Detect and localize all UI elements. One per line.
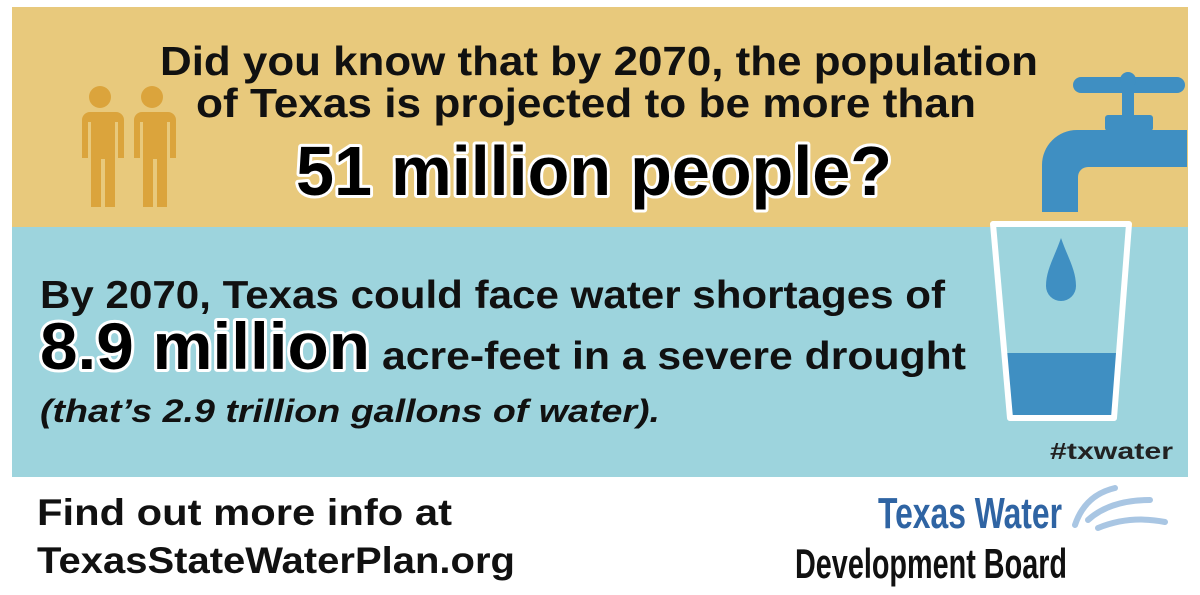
logo: Texas Water Development Board — [795, 488, 1165, 587]
callout: 8.9 million acre-feet: 8.9 million — [40, 309, 370, 383]
callout: 8.9 million acre-feet: acre-feet in a severe drought — [382, 335, 966, 378]
panel: water shortage (blue band) — [12, 227, 1188, 477]
text: hashtag: #txwater — [1050, 438, 1173, 464]
callout: 51 million people: 51 million people? — [296, 132, 892, 210]
heading: did you know: Did you know that by 2070, the population — [160, 38, 1038, 84]
text: by 2070 shortages: By 2070, Texas could face water shortages of — [40, 274, 946, 317]
text: find out more: TexasStateWaterPlan.org — [37, 540, 515, 581]
text: of Texas projected: of Texas is projected to be more than — [196, 80, 976, 126]
icon: glass of water — [993, 224, 1129, 418]
icon: faucet — [1042, 72, 1187, 212]
icon: two people — [82, 86, 176, 207]
panel: population (yellow band) — [12, 7, 1188, 228]
text: find out more: Find out more info at — [37, 492, 452, 533]
logo: Texas Water Development Board: Development Board — [795, 540, 1067, 587]
logo: Texas Water Development Board: Texas Water — [878, 489, 1062, 538]
text: find out more — [37, 492, 515, 581]
text: trillion gallons: (that’s 2.9 trillion gallons of water). — [40, 393, 660, 429]
icon: water spray arcs — [1075, 488, 1165, 528]
callout: 8.9 million acre-feet — [40, 309, 966, 383]
